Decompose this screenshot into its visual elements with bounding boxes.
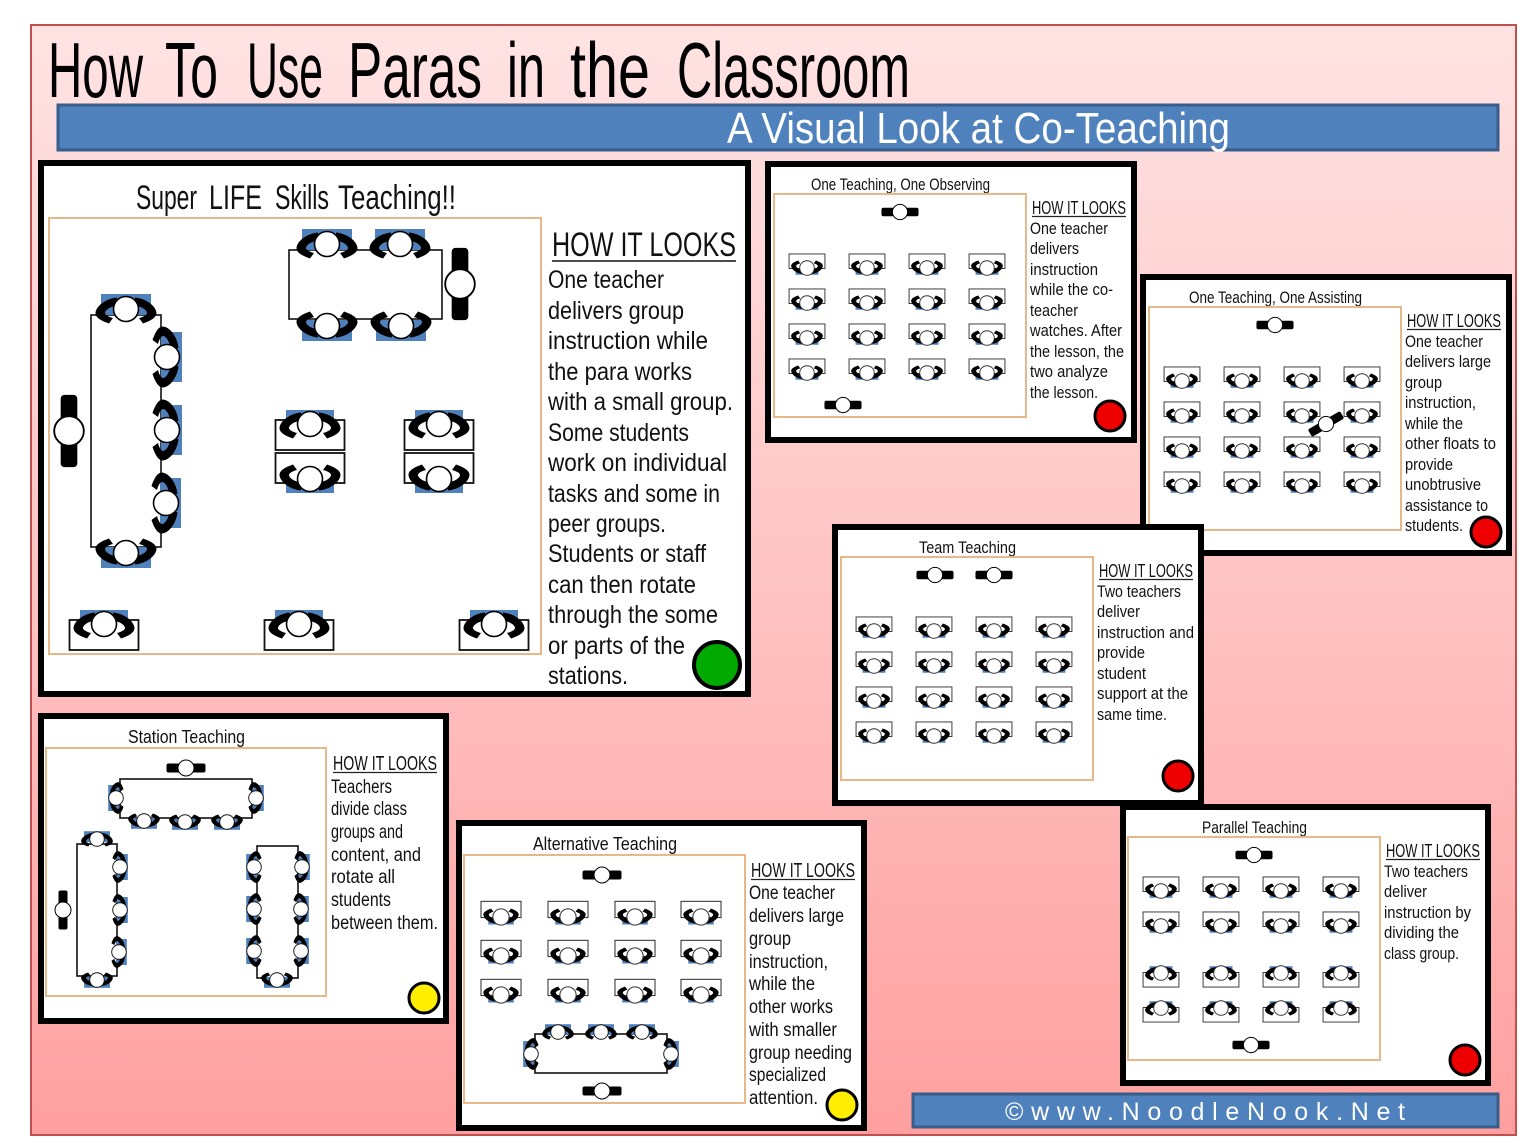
description text: deliver (1097, 602, 1140, 621)
status dot: green (694, 642, 740, 688)
classroom diagram (46, 748, 326, 996)
classroom diagram (1149, 307, 1401, 530)
panel: Parallel Teaching (1123, 807, 1488, 1083)
description text: One teacher (749, 883, 836, 904)
description text: Teachers (331, 777, 392, 798)
description text: instruction, (749, 952, 828, 973)
description text: provide (1097, 643, 1145, 662)
description text: the lesson, the (1030, 342, 1124, 361)
panel title (136, 179, 456, 217)
classroom diagram (774, 194, 1026, 417)
status dot: red (1450, 1045, 1480, 1075)
subtitle banner (58, 104, 1498, 153)
description text: group (749, 929, 791, 950)
description text: the lesson. (1030, 383, 1098, 402)
description text: students. (1405, 516, 1463, 535)
description text: instruction by (1384, 903, 1471, 922)
panel title: Skills (275, 179, 329, 217)
description text: unobtrusive (1405, 475, 1481, 494)
heading: how it looks: HOW IT LOOKS (333, 753, 437, 775)
description text: teacher (1030, 301, 1078, 320)
description text: tasks and some in (548, 480, 720, 508)
description text: with a small group. (547, 388, 733, 416)
footer banner: ©www.NoodleNook.Net (1005, 1098, 1405, 1126)
status dot: red (1471, 517, 1501, 547)
description text: work on individual (547, 449, 727, 477)
status dot: red (1163, 761, 1193, 791)
footer banner (913, 1094, 1498, 1127)
description text: Some students (548, 419, 689, 447)
panel title: Teaching!! (338, 179, 456, 217)
description text: through the some (548, 601, 718, 629)
description text: between them. (331, 913, 438, 934)
classroom diagram (1128, 837, 1380, 1060)
description text: or parts of the (548, 632, 685, 660)
description text: rotate all (331, 867, 395, 888)
description text: delivers large (749, 906, 844, 927)
description text: stations. (548, 662, 628, 690)
title: in (507, 26, 545, 114)
description text: One teacher (1405, 332, 1483, 351)
description text: peer groups. (548, 510, 666, 538)
description text (547, 266, 733, 690)
title: Use (247, 26, 323, 114)
status dot: red (1095, 401, 1125, 431)
panel: Station Teaching (41, 716, 446, 1021)
description text: provide (1405, 455, 1453, 474)
classroom diagram (841, 557, 1093, 780)
panel title: One Teaching, One Observing (811, 175, 990, 194)
panel title: Parallel Teaching (1202, 818, 1307, 837)
description text: with smaller (748, 1020, 838, 1041)
description text (1384, 862, 1471, 963)
title: the (570, 26, 650, 114)
panel: One Teaching, One Assisting (1143, 277, 1509, 553)
description text: One teacher (1030, 219, 1108, 238)
panel title: LIFE (209, 179, 262, 217)
heading: how it looks: HOW IT LOOKS (1032, 198, 1126, 218)
classroom diagram (49, 218, 541, 654)
description text (331, 777, 438, 934)
description text: support at the (1097, 684, 1188, 703)
description text: Two teachers (1097, 582, 1181, 601)
description text: instruction and (1097, 623, 1194, 642)
description text: delivers group (548, 297, 684, 325)
title: To (165, 26, 218, 114)
heading: how it looks: HOW IT LOOKS (1386, 841, 1480, 861)
description text: assistance to (1405, 496, 1488, 515)
subtitle banner: A Visual Look at Co-Teaching (727, 104, 1230, 153)
description text: students (331, 890, 391, 911)
description text: One teacher (548, 266, 664, 294)
description text: two analyze (1030, 362, 1108, 381)
description text: group (1405, 373, 1442, 392)
heading: how it looks: HOW IT LOOKS (1099, 561, 1193, 581)
description text: while the (1404, 414, 1463, 433)
panel title: Station Teaching (128, 727, 245, 747)
description text: groups and (331, 822, 403, 843)
heading: how it looks: HOW IT LOOKS (552, 226, 736, 264)
description text: class group. (1384, 944, 1459, 963)
status dot: yellow (827, 1090, 857, 1120)
description text: other floats to (1405, 434, 1496, 453)
panel: One Teaching, One Observing (768, 164, 1134, 440)
description text: Students or staff (548, 540, 706, 568)
description text: instruction, (1405, 393, 1476, 412)
description text (1097, 582, 1194, 724)
description text: student (1097, 664, 1146, 683)
description text (1029, 219, 1124, 402)
panel title: Team Teaching (919, 538, 1016, 557)
description text: attention. (749, 1088, 818, 1109)
description text (748, 883, 852, 1109)
description text: delivers (1030, 239, 1079, 258)
description text: specialized (749, 1065, 826, 1086)
description text: the para works (548, 358, 692, 386)
description text: while the co- (1029, 280, 1113, 299)
panel title: One Teaching, One Assisting (1189, 288, 1362, 307)
description text: Two teachers (1384, 862, 1468, 881)
description text: content, and (331, 845, 421, 866)
description text: while the (748, 974, 815, 995)
description text: instruction while (548, 327, 708, 355)
heading: how it looks: HOW IT LOOKS (751, 860, 855, 882)
panel title: Alternative Teaching (533, 834, 677, 854)
description text: dividing the (1384, 923, 1459, 942)
panel title: Super (136, 179, 197, 217)
panel: Super LIFE Skills Teaching (41, 163, 748, 694)
description text: can then rotate (548, 571, 696, 599)
description text: group needing (749, 1043, 852, 1064)
panel: Team Teaching (835, 527, 1201, 803)
title: How (48, 26, 143, 114)
description text: delivers large (1405, 352, 1491, 371)
title: Paras (348, 26, 482, 114)
description text: other works (749, 997, 833, 1018)
title (48, 26, 910, 114)
description text: same time. (1097, 705, 1167, 724)
panel: Alternative Teaching (459, 823, 864, 1128)
description text: watches. After (1029, 321, 1122, 340)
description text: instruction (1030, 260, 1098, 279)
description text: deliver (1384, 882, 1427, 901)
description text (1404, 332, 1496, 535)
title: Classroom (677, 26, 910, 114)
classroom diagram (464, 855, 745, 1103)
status dot: yellow (409, 983, 439, 1013)
description text: divide class (331, 799, 407, 820)
